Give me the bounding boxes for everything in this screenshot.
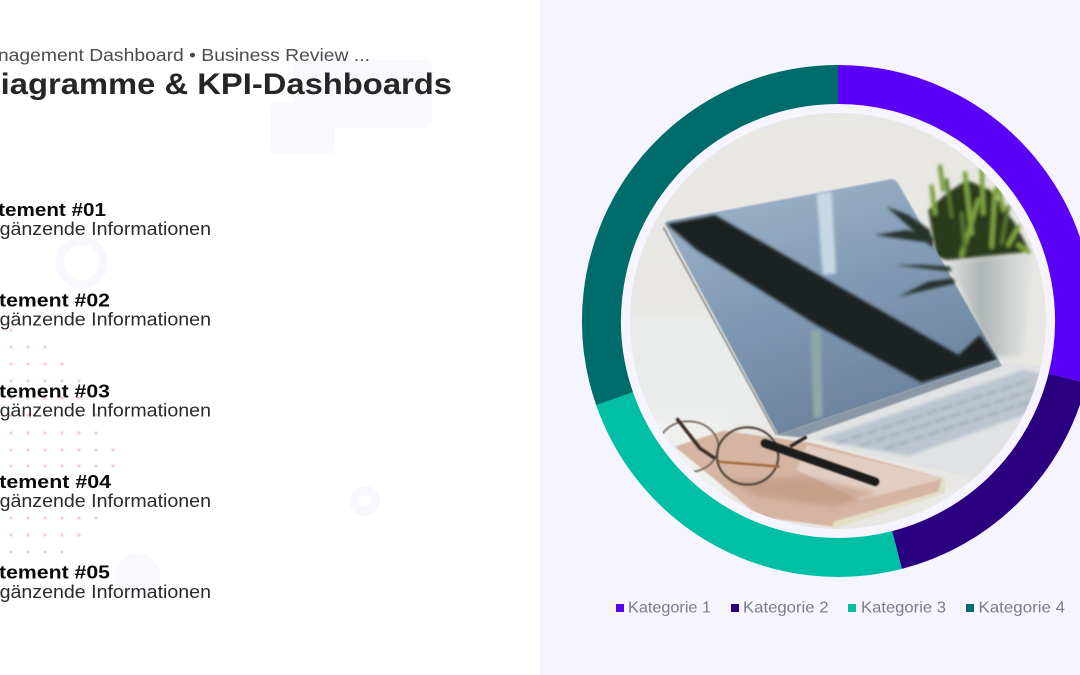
segment: Kategorie 3 <box>615 399 897 557</box>
notebook <box>675 431 945 528</box>
dot pattern <box>9 328 115 554</box>
plant leaves <box>928 167 1030 260</box>
keyboard <box>818 370 1040 456</box>
statement 5 <box>0 563 211 602</box>
panel: left background <box>0 0 540 675</box>
legend item: Kategorie 2: Kategorie 2 <box>743 600 829 617</box>
legend <box>616 600 1065 617</box>
screen reflection: light bar <box>817 192 836 275</box>
statement 1 <box>0 200 211 239</box>
glasses <box>658 418 807 485</box>
segment: Kategorie 4 <box>601 84 838 399</box>
donut chart <box>601 84 1075 557</box>
laptop screen <box>665 179 998 435</box>
legend item: Kategorie 1: Kategorie 1 <box>628 600 711 617</box>
statement 2 <box>0 290 211 330</box>
wall and desk tones <box>652 414 726 494</box>
segment: Kategorie 1 <box>838 84 1075 378</box>
segment: Kategorie 2 <box>897 378 1068 550</box>
screen bezel strip <box>777 359 1002 437</box>
panel: right background <box>540 0 1080 675</box>
screen reflection: dark band <box>667 215 997 383</box>
legend item: Kategorie 4: Kategorie 4 <box>978 600 1065 617</box>
laptop base <box>976 368 1040 476</box>
notebook page shadow <box>727 477 877 507</box>
decorative background shapes <box>60 60 432 598</box>
laptop lid edge <box>663 227 777 435</box>
plant fronds in reflection <box>875 207 955 297</box>
statement 4 <box>0 472 211 511</box>
pen <box>765 443 875 482</box>
plant pot <box>947 252 1033 357</box>
legend item: Kategorie 3: Kategorie 3 <box>861 600 946 617</box>
statement 3 <box>0 381 211 420</box>
photo: laptop on desk <box>630 113 1046 529</box>
